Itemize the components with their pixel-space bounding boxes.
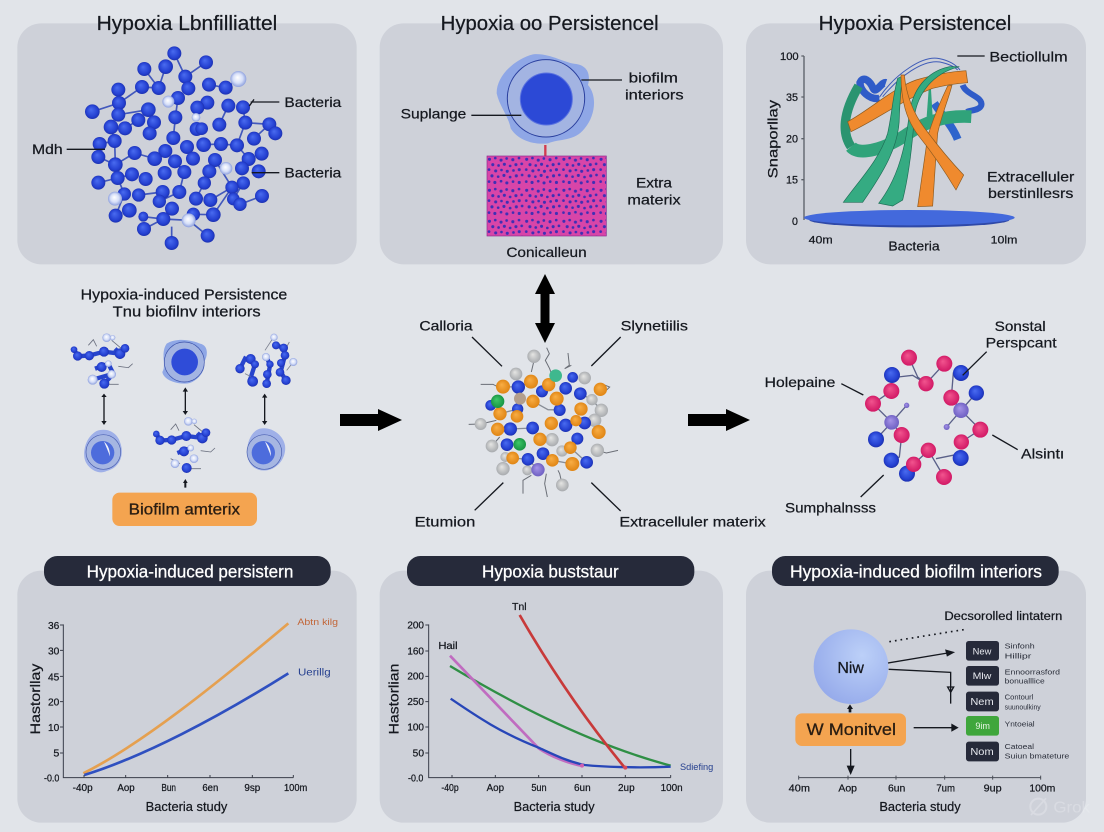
chart: falling lines: 200	[407, 620, 424, 631]
axis: bottom timeline: Aop	[838, 784, 857, 795]
label: Bacteria upper: Bacteria	[284, 94, 342, 110]
icon: vesicle bottom-right	[247, 428, 285, 471]
arrow: small up	[183, 479, 188, 488]
panel: biofilm flow diagram	[746, 556, 1091, 823]
chart: rising lines: -0.0	[44, 774, 60, 785]
axis: vertical: 15	[786, 175, 798, 187]
arrow: Niw elbow down	[889, 669, 954, 704]
label: Slynetiilis: Slynetiilis	[621, 318, 688, 334]
chart: falling lines: Hastorlian	[386, 664, 402, 734]
heading: hypoxia-induced persistence	[81, 288, 287, 321]
heading pill: hypoxia-induced persistern	[44, 556, 331, 586]
label: Decsorolled lintatern: Decsorolled lintatern	[944, 609, 1062, 623]
icon: molecule chain top-left	[71, 333, 133, 389]
chart: falling lines: 2up	[618, 783, 635, 794]
axis: vertical: 35	[786, 92, 798, 104]
row 2	[966, 666, 1060, 686]
panel: central cluster	[415, 318, 766, 530]
chart: rising lines: 20	[48, 698, 60, 709]
heading pill: hypoxia buststaur: Hypoxia buststaur	[482, 561, 619, 581]
axis: bottom timeline: 40m	[789, 784, 810, 795]
label: Mdh: Mdh	[32, 141, 63, 157]
axis labels	[809, 235, 1017, 254]
arrow: into central cluster	[340, 409, 402, 431]
callout: Biofilm amterix: Biofilm amterix	[129, 502, 240, 519]
label: Extra matrix	[627, 175, 681, 207]
chart: falling lines: -0.0	[408, 774, 424, 785]
arrow: right double	[262, 394, 267, 425]
row 1: Hillipr	[1005, 651, 1032, 660]
chart: falling lines: 250	[407, 697, 424, 708]
chart: rising lines: Abtn kilg	[297, 617, 338, 627]
label: Extracelluler berstinllesrs: berstinllesrs	[988, 185, 1073, 201]
chart: rising lines: Bacteria study	[146, 799, 228, 814]
dotted leader	[889, 629, 968, 642]
node: W Monitvel	[795, 713, 906, 746]
label: Bectiollulm: Bectiollulm	[989, 49, 1068, 65]
heading: hypoxia-induced persistence: Tnu biofilnv interiors	[113, 305, 261, 321]
label: Etumion: Etumion	[415, 514, 475, 530]
label: Holepaine	[765, 374, 863, 395]
axis: bottom timeline: 100m	[1029, 784, 1055, 795]
label: Extracelluler berstinllesrs: Extracelluler	[987, 168, 1075, 184]
chart: base plate	[804, 210, 1015, 227]
label: Bacteria lower	[252, 165, 342, 181]
icon: molecule chain top-right	[235, 334, 297, 388]
chart: falling lines: Aop	[487, 783, 504, 794]
label: Bacteria upper	[249, 94, 342, 110]
panel: right ring molecule	[765, 318, 1064, 516]
callout: Biofilm amterix	[112, 493, 257, 526]
axis: vertical	[764, 51, 804, 228]
label: biofilm interiors: biofilm	[629, 69, 678, 85]
icon: biofilm cell top-center	[162, 340, 207, 384]
panel: line chart persistence	[17, 556, 357, 823]
chart: falling lines: -40p	[441, 783, 459, 794]
list: legend boxes	[966, 641, 1069, 761]
label: Sonstal Perspcant	[963, 318, 1057, 375]
axis: bottom timeline: 7um	[936, 784, 955, 795]
row 1: Sinfonh	[1005, 642, 1035, 651]
row 5	[966, 742, 1069, 761]
heading: panel 1: Hypoxia Lbnfilliattel	[97, 13, 277, 35]
label: Sonstal Perspcant: Sonstal	[995, 318, 1046, 334]
heading pill: hypoxia-induced biofilm interiors	[772, 556, 1059, 586]
row 2: Mlw	[973, 671, 992, 681]
chart: bacteria network	[85, 46, 282, 250]
axis: bottom timeline	[789, 776, 1055, 814]
label: Bectiollulm	[957, 49, 1068, 65]
row 3: suunoulkiny	[1005, 702, 1041, 711]
chart: falling lines	[386, 602, 713, 814]
arrow: vertical double	[535, 274, 555, 343]
axis: bottom timeline: Bacteria study	[879, 799, 961, 814]
heading: panel 2: Hypoxia oo Persistencel	[441, 13, 659, 35]
panel: biofilm cell and matrix	[380, 13, 723, 264]
chart: falling lines: 100	[407, 722, 424, 733]
chart: rising lines: 100m	[284, 783, 307, 794]
label: Suplange	[401, 105, 521, 121]
chart: falling lines: 5un	[531, 783, 547, 794]
axis labels: Bacteria	[888, 239, 940, 254]
row 5: Catoeal	[1005, 742, 1034, 751]
arrow: red connector	[542, 145, 549, 162]
chart: ribbon protein	[843, 58, 981, 207]
heading pill: hypoxia-induced persistern: Hypoxia-induced persistern	[87, 561, 293, 581]
label: Bacteria lower: Bacteria	[284, 165, 342, 181]
node: Niw: Niw	[837, 660, 865, 677]
label: biofilm interiors: interiors	[625, 87, 684, 103]
chart: rising lines: 10	[48, 723, 60, 734]
icon: molecule chain bottom-center	[153, 417, 215, 473]
axis labels: 10lm	[991, 235, 1017, 247]
label: Sonstal Perspcant: Perspcant	[986, 335, 1057, 351]
chart: extracellular matrix tissue	[487, 156, 606, 236]
chart: falling lines: 100n	[661, 783, 683, 794]
axis: vertical: 100	[780, 51, 799, 63]
panel: molecule network	[17, 13, 357, 264]
chart: falling lines: Tnl	[512, 602, 527, 613]
row 5: Suiun bmateture	[1005, 751, 1069, 760]
label: Conicalleun: Conicalleun	[506, 244, 587, 260]
chart: rising lines: 45	[48, 672, 60, 683]
heading pill: hypoxia buststaur	[407, 556, 694, 586]
heading: panel 3: Hypoxia Persistencel	[819, 13, 1011, 35]
row 2: Ennoorrasford	[1005, 667, 1060, 676]
chart: rising lines: Bun	[161, 783, 176, 794]
label: Calloria	[419, 318, 502, 366]
row 5: Nom	[970, 747, 994, 758]
icon: biofilm cell	[497, 54, 594, 144]
chart: rising lines: Hastorllay	[27, 664, 43, 734]
chart: falling lines: 6un	[574, 783, 591, 794]
chart: rising lines	[27, 617, 338, 814]
chart: rising lines: 36	[48, 621, 60, 632]
row 1: New	[973, 646, 992, 656]
axis: vertical: Snaporllay	[764, 100, 780, 178]
label: Suplange: Suplange	[401, 105, 467, 121]
chart: mixed molecule cluster	[469, 348, 618, 497]
watermark: Grok	[1030, 798, 1091, 816]
chart: ring molecule	[865, 350, 988, 485]
chart: rising lines: 30	[48, 646, 60, 657]
chart: rising lines: 6en	[202, 783, 218, 794]
row 4	[966, 716, 1035, 736]
heading pill: hypoxia-induced biofilm interiors: Hypoxia-induced biofilm interiors	[790, 561, 1042, 581]
axis labels: 40m	[809, 235, 833, 247]
row 4: 9im	[975, 721, 990, 731]
axis: vertical: 20	[786, 134, 798, 146]
heading: hypoxia-induced persistence: Hypoxia-induced Persistence	[81, 288, 287, 304]
label: Sumphalnsss: Sumphalnsss	[785, 500, 876, 516]
arrow: Niw to top box	[888, 650, 953, 663]
row 4: Yntoeial	[1005, 720, 1035, 729]
panel: left mechanism column	[71, 288, 297, 526]
label: Alsinti: Alsintı	[1021, 446, 1064, 462]
panel: line chart bustaur	[380, 556, 723, 823]
row 3: Contourl	[1005, 692, 1034, 701]
chart: rising lines: 5	[53, 748, 60, 759]
axis: vertical: 0	[792, 216, 798, 228]
label: Extracelluler berstinllesrs	[987, 168, 1075, 201]
chart: falling lines: Bacteria study	[514, 799, 595, 814]
arrow: left double	[101, 394, 107, 425]
chart: rising lines: Uerillg	[298, 668, 331, 679]
axis: bottom timeline: 9up	[984, 784, 1002, 795]
icon: vesicle bottom-left	[84, 430, 122, 472]
row 1	[966, 641, 1035, 661]
arrow: out of central cluster	[688, 409, 750, 431]
label: Slynetiilis	[591, 318, 688, 366]
row 3	[966, 692, 1041, 711]
chart: falling lines: 50	[413, 748, 424, 759]
watermark: Grok: Grok	[1053, 799, 1091, 816]
chart: falling lines: Hail	[438, 641, 458, 652]
row 2: bonualllice	[1005, 677, 1045, 686]
label: Calloria: Calloria	[419, 318, 473, 334]
chart: falling lines: Sdiefing	[680, 762, 713, 772]
chart: falling lines: 200	[407, 672, 424, 683]
label: Alsinti	[992, 435, 1064, 462]
arrow: monitor up	[847, 704, 853, 712]
chart: falling lines: 160	[407, 646, 424, 657]
label: biofilm interiors	[581, 69, 684, 103]
arrow: center double	[183, 387, 188, 415]
row 3: Nem	[970, 697, 994, 708]
chart: rising lines: Aop	[117, 783, 135, 794]
label: Extra matrix: Extra	[636, 175, 672, 191]
panel: ribbon structure	[746, 13, 1086, 264]
label: Etumion	[415, 483, 503, 530]
arrow: monitor down	[848, 749, 854, 773]
chart: rising lines: -40p	[73, 783, 93, 794]
node: W Monitvel: W Monitvel	[807, 720, 896, 739]
arrow: monitor to green box	[914, 725, 957, 731]
label: Mdh	[32, 141, 105, 157]
axis: bottom timeline: 6un	[888, 784, 906, 795]
label: Extracelluler matrix	[591, 483, 766, 530]
label: Sumphalnsss	[785, 475, 884, 516]
label: Extracelluler matrix: Extracelluler materix	[619, 514, 766, 530]
label: Extra matrix: materix	[627, 191, 681, 207]
label: Holepaine: Holepaine	[765, 374, 836, 390]
node: Niw	[814, 629, 888, 704]
chart: rising lines: 9sp	[244, 783, 261, 794]
